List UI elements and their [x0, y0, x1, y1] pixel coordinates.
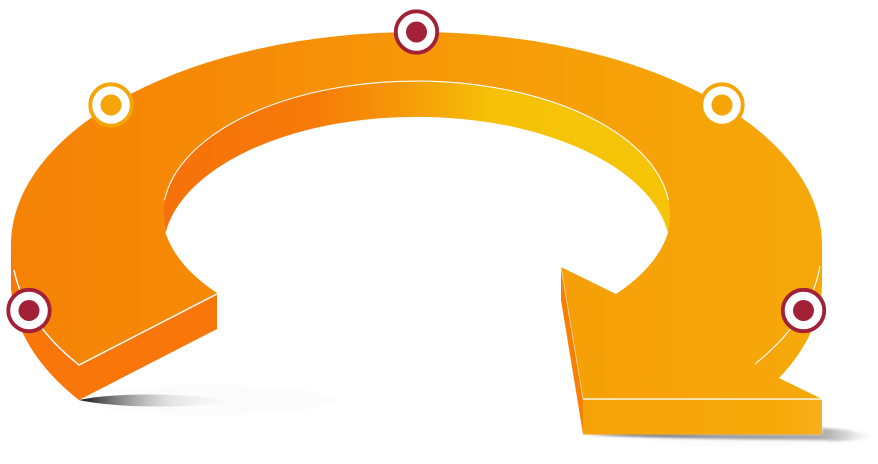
left lower corner fill: [11, 245, 79, 400]
left outer wall: [11, 245, 217, 400]
inner wall: [163, 81, 670, 233]
badge: lower right: [783, 290, 824, 331]
curved arrow top face: [11, 32, 822, 399]
white edge highlights: [14, 81, 822, 399]
badge: lower left: [8, 290, 50, 331]
arrow head front face: [583, 399, 822, 434]
right shadow: [585, 428, 876, 447]
badge: upper left: [90, 84, 132, 126]
badge: upper right: [701, 84, 743, 126]
left shadow: [79, 385, 335, 415]
badge: top: [396, 11, 437, 53]
arrow head side facet: [561, 267, 583, 434]
